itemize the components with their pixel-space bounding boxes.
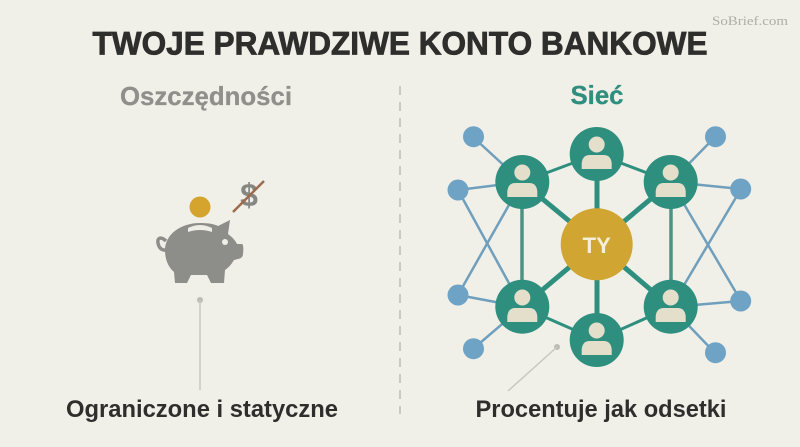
outer nodes [448, 126, 751, 363]
heading: savings: Oszczędności [120, 81, 292, 111]
callout line: savings [197, 297, 203, 390]
title: TWOJE PRAWDZIWE KONTO BANKOWE [92, 26, 708, 62]
person nodes [495, 127, 698, 367]
center node: you: TY [583, 233, 611, 258]
network diagram [448, 126, 751, 367]
label: network: Procentuje jak odsetki [476, 396, 726, 423]
outer links [458, 137, 741, 353]
center node: you [561, 208, 633, 280]
icon: piggy bank [158, 220, 243, 283]
icon: coin [190, 196, 210, 218]
icon: crossed out dollar [233, 177, 264, 213]
inner links [522, 154, 671, 340]
label: savings: Ograniczone i statyczne [66, 396, 338, 423]
callout line: network [508, 344, 560, 391]
watermark: SoBrief.com [712, 13, 788, 28]
spokes [522, 154, 671, 340]
icon: crossed out dollar: $ [240, 177, 258, 213]
heading: network: Sieć [570, 80, 624, 110]
